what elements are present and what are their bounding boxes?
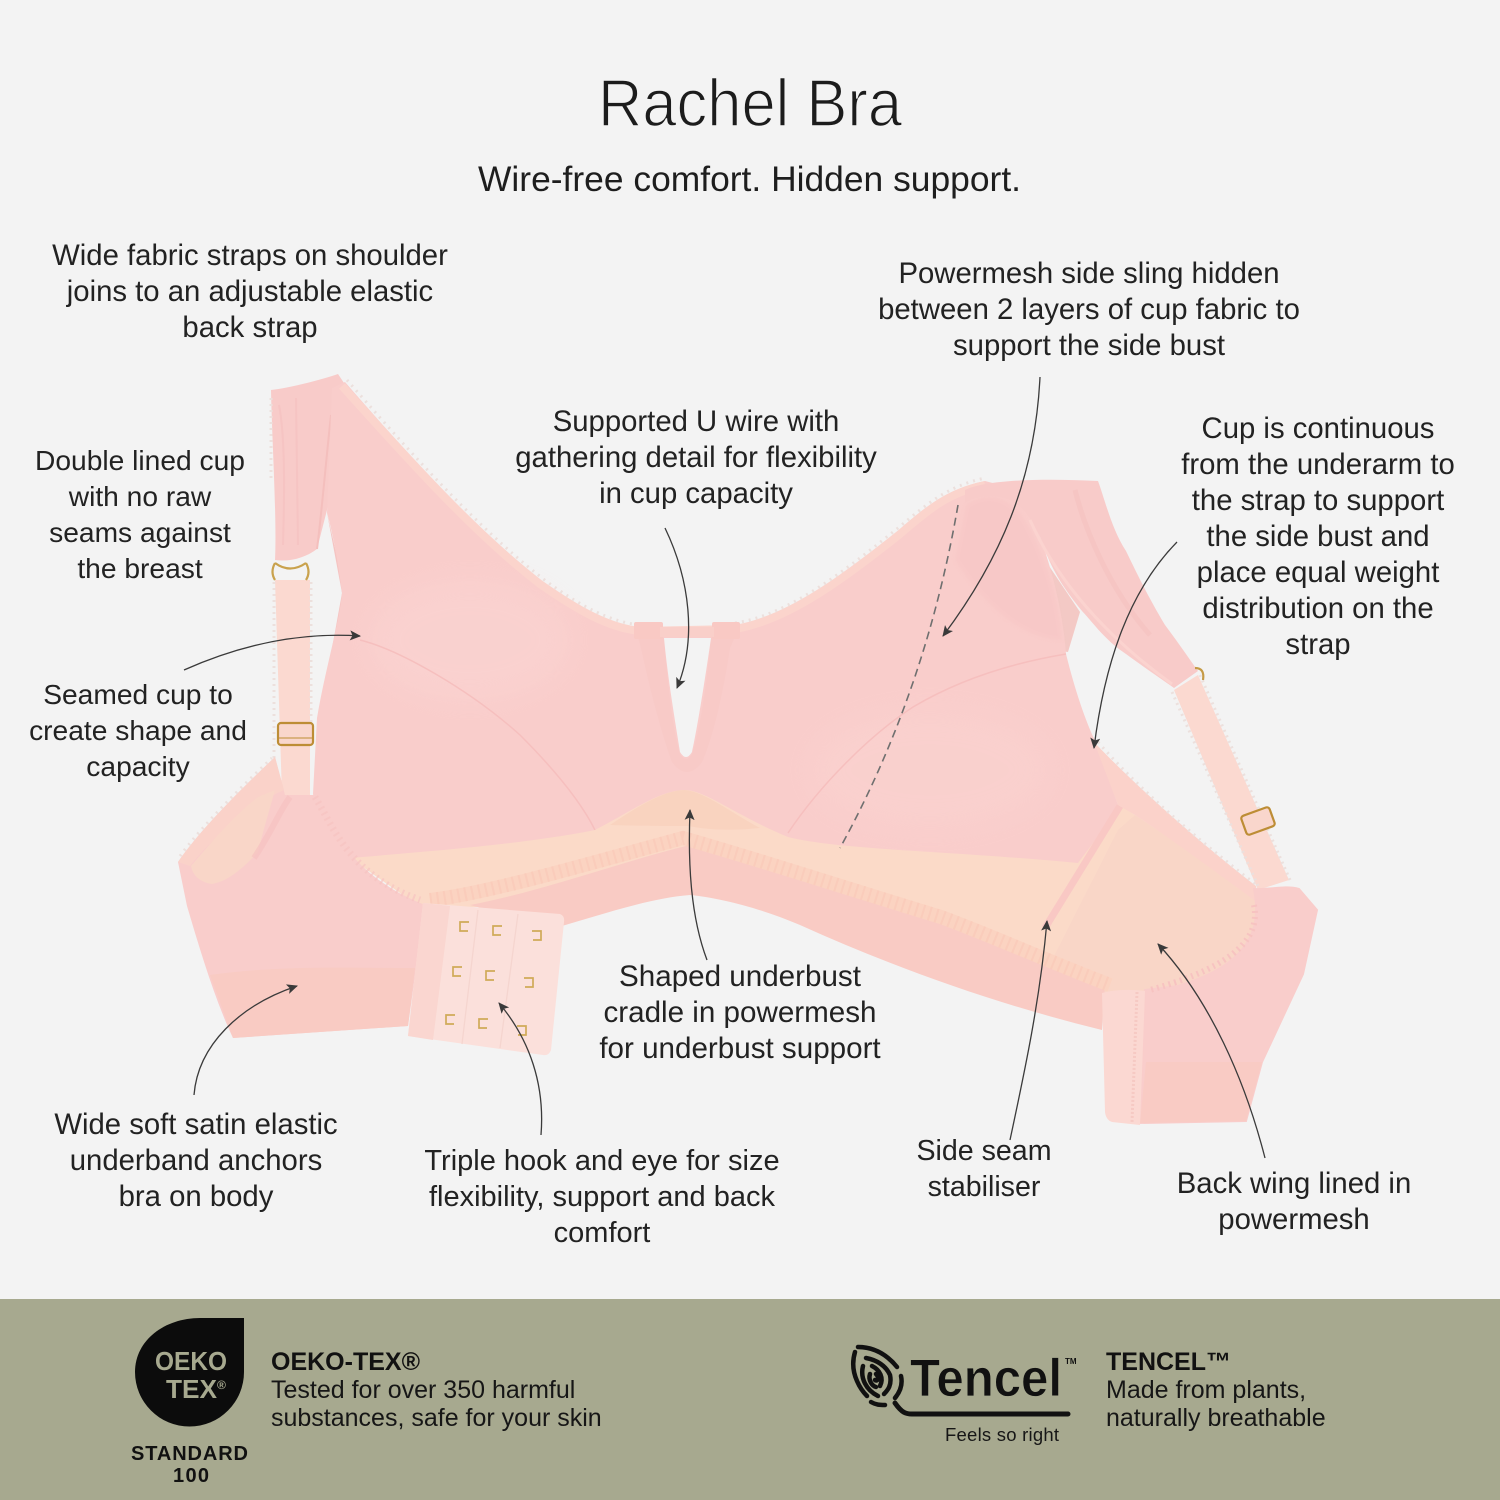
arrow: underbust cradle: [689, 810, 707, 960]
label: double lined cup: with no raw: [68, 480, 212, 512]
OEKO-TEX text: substances, safe for your skin: [271, 1404, 602, 1432]
left wing elastic band: [210, 968, 415, 1038]
hooks: [446, 922, 541, 1035]
label: underbust cradle: Shaped underbust: [619, 960, 861, 993]
label: side seam: Side seam: [916, 1135, 1052, 1167]
arrow: side seam: [1010, 921, 1047, 1140]
icon: OEKO-TEX badge: [131, 1318, 248, 1487]
label: continuous cup: distribution on the: [1202, 592, 1434, 625]
icon: OEKO-TEX badge: TEX: [166, 1374, 217, 1404]
side seam stabiliser: [1045, 806, 1120, 928]
footer band: [0, 1299, 1500, 1500]
label: continuous cup: the strap to support: [1192, 484, 1444, 517]
arrow: continuous cup: [1094, 542, 1177, 748]
left armhole lining: [320, 513, 347, 715]
right back wing: [1102, 887, 1317, 1125]
label: continuous cup: place equal weight: [1197, 556, 1439, 589]
underband: [470, 845, 1105, 1030]
arrow: U wire: [665, 528, 689, 688]
label: continuous cup: from the underarm to: [1181, 448, 1455, 481]
icon: OEKO-TEX badge: 100: [173, 1465, 209, 1487]
neckline binding: [342, 380, 985, 631]
folded wing end: [1102, 990, 1145, 1125]
keyhole opening with U wire: [634, 622, 740, 772]
Tencel text: TENCEL™: [1106, 1348, 1231, 1376]
Tencel text: Made from plants,: [1106, 1376, 1306, 1404]
label: straps: back strap: [182, 311, 318, 344]
label: straps: joins to an adjustable elastic: [66, 275, 433, 308]
product illustration: bra: [178, 374, 1317, 1125]
label: double lined cup: Double lined cup: [35, 444, 245, 476]
label: back wing: Back wing lined in: [1177, 1167, 1411, 1200]
back lining behind right cup: [1045, 560, 1080, 652]
icon: Tencel logo: [853, 1347, 1077, 1445]
hook and eye tape: [408, 903, 564, 1055]
underbust mesh and back mesh: [350, 790, 1257, 997]
label: continuous cup: the side bust and: [1206, 520, 1430, 553]
label: underbust cradle: cradle in powermesh: [603, 996, 877, 1029]
label: double lined cup: the breast: [77, 552, 203, 584]
label: double lined cup: seams against: [49, 516, 231, 548]
right band binding: [1094, 742, 1258, 903]
left wing binding: [178, 757, 284, 866]
label: underband: Wide soft satin elastic: [54, 1108, 338, 1141]
OEKO-TEX text: Tested for over 350 harmful: [271, 1376, 575, 1404]
Tencel text: naturally breathable: [1106, 1404, 1326, 1432]
arrows: [184, 377, 1265, 1158]
icon: Tencel logo: Tencel: [910, 1349, 1062, 1408]
label: hook and eye: flexibility, support and back: [429, 1181, 776, 1213]
left shoulder strap and elastic: [271, 374, 350, 795]
label: straps: Wide fabric straps on shoulder: [52, 239, 448, 272]
dashed side sling line: [840, 505, 958, 848]
label: underband: bra on body: [119, 1180, 274, 1213]
label: seamed cup: capacity: [86, 750, 191, 782]
label: continuous cup: strap: [1285, 628, 1351, 661]
label: powermesh side sling: support the side bust: [953, 329, 1225, 362]
label: seamed cup: create shape and: [29, 714, 247, 746]
label: powermesh side sling: between 2 layers of cup fabric to: [878, 293, 1300, 326]
label: continuous cup: Cup is continuous: [1202, 412, 1434, 445]
left wing lining: [191, 790, 275, 884]
inner cup shadow: [955, 497, 1062, 640]
label: U wire: in cup capacity: [599, 477, 793, 510]
label: hook and eye: comfort: [554, 1217, 650, 1249]
front cups: [313, 382, 1118, 868]
label: hook and eye: Triple hook and eye for size: [424, 1145, 780, 1177]
label: underbust cradle: for underbust support: [599, 1032, 881, 1065]
label: side seam: stabiliser: [928, 1171, 1041, 1203]
left back wing: [178, 757, 425, 1038]
arrow: seamed cup: [184, 635, 360, 670]
label: U wire: Supported U wire with: [553, 405, 839, 438]
left cup seam: [360, 640, 595, 830]
icon: OEKO-TEX badge: OEKO: [155, 1346, 227, 1376]
icon: OEKO-TEX badge: STANDARD: [131, 1443, 248, 1465]
label: seamed cup: Seamed cup to: [43, 678, 233, 710]
arrow: hook and eye: [499, 1003, 542, 1135]
icon: OEKO-TEX badge: ®: [217, 1378, 226, 1392]
arrow: underband: [194, 986, 297, 1095]
right shoulder strap and elastic: [965, 480, 1290, 890]
icon: Tencel logo: Feels so right: [945, 1424, 1059, 1445]
arrow: powermesh sling: [943, 377, 1040, 636]
arrow: back wing: [1158, 944, 1265, 1158]
label: powermesh side sling: Powermesh side sling hidden: [898, 257, 1280, 290]
ruched elastic on underband: [430, 838, 1110, 985]
label: underband: underband anchors: [70, 1144, 322, 1177]
subtitle: Wire-free comfort. Hidden support.: [478, 160, 1021, 199]
label: U wire: gathering detail for flexibility: [515, 441, 877, 474]
title: Rachel Bra: [598, 66, 903, 141]
icon: Tencel logo: TM: [1065, 1357, 1077, 1366]
OEKO-TEX text: OEKO-TEX®: [271, 1348, 421, 1376]
label: back wing: powermesh: [1218, 1203, 1370, 1236]
right cup seam: [788, 654, 1066, 833]
